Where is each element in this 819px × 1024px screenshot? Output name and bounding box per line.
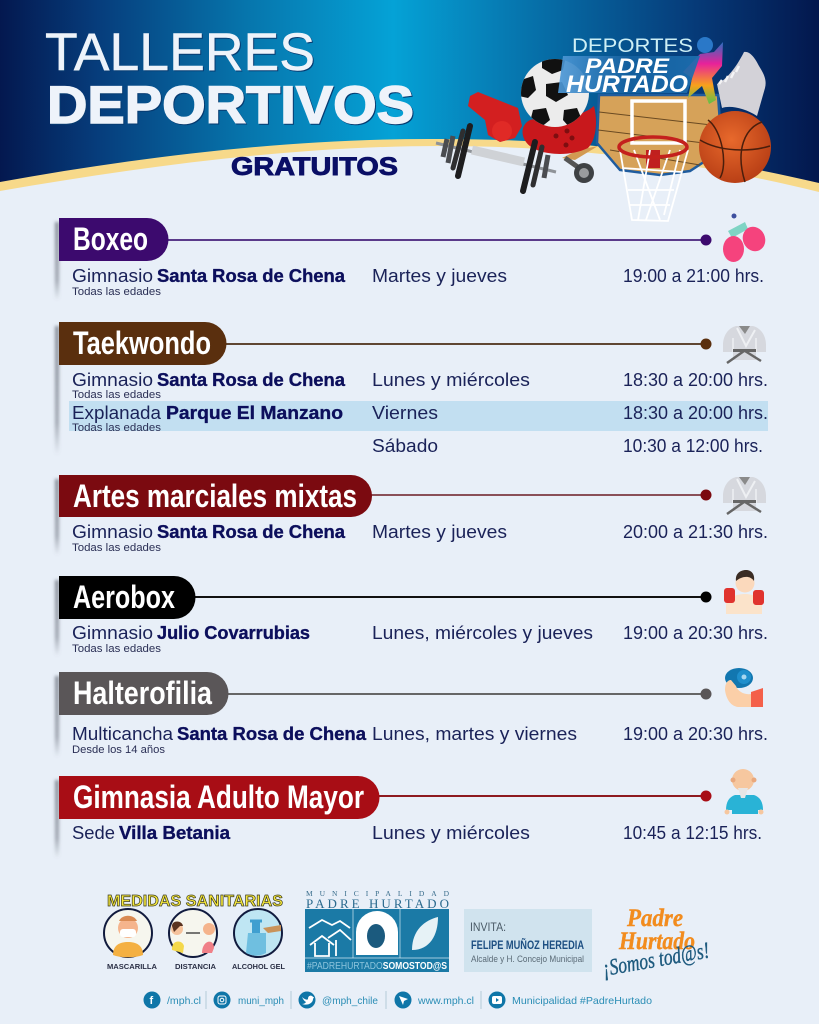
label: distancia: DISTANCIA bbox=[175, 962, 217, 971]
schedule row: Gimnasio bbox=[72, 522, 153, 542]
logo: padre hurtado somos todos: Hurtado bbox=[618, 928, 695, 955]
icon: basketball hoop and net bbox=[619, 137, 688, 221]
schedule row bbox=[72, 623, 768, 655]
logo: deportes padre hurtado: PADRE bbox=[585, 55, 670, 78]
schedule row 1 bbox=[72, 370, 768, 401]
schedule row: 19:00 a 20:30 hrs. bbox=[623, 623, 768, 643]
schedule row: 20:00 a 21:30 hrs. bbox=[623, 522, 768, 542]
icon: martial arts gi bbox=[723, 477, 766, 514]
icon: basketball bbox=[699, 111, 771, 183]
icon: shoe bbox=[717, 52, 766, 116]
title: DEPORTIVOS bbox=[47, 76, 414, 135]
schedule row 1: Santa Rosa de Chena bbox=[157, 370, 346, 390]
icon: boxer bbox=[724, 570, 764, 614]
label: mascarilla: MASCARILLA bbox=[107, 962, 158, 971]
schedule row: Lunes, martes y viernes bbox=[372, 724, 577, 744]
logo: padre hurtado somos todos: ¡Somos tod@s! bbox=[601, 938, 711, 981]
icon: whistle bbox=[468, 92, 522, 142]
icon: arm with weight bbox=[725, 668, 763, 707]
youtube: Municipalidad #PadreHurtado bbox=[512, 995, 652, 1007]
sports illustration bbox=[436, 35, 771, 221]
schedule row 2: 18:30 a 20:00 hrs. bbox=[623, 403, 768, 423]
heading: Gimnasia Adulto Mayor: Gimnasia Adulto Mayor bbox=[73, 779, 364, 815]
icon: soccer ball bbox=[519, 56, 589, 128]
schedule row bbox=[72, 823, 762, 843]
panel: invita: FELIPE MUÑOZ HEREDIA bbox=[471, 939, 584, 952]
panel: Halterofilia bbox=[55, 668, 768, 757]
icon: alcohol gel bbox=[234, 909, 282, 957]
logo: padre hurtado somos todos bbox=[601, 905, 711, 981]
schedule row bbox=[72, 266, 764, 298]
icon: distance bbox=[169, 909, 217, 957]
schedule row: Santa Rosa de Chena bbox=[177, 724, 367, 744]
schedule row: Desde los 14 años bbox=[72, 744, 166, 756]
schedule row: Gimnasio bbox=[72, 623, 153, 643]
subtitle: GRATUITOS bbox=[231, 153, 398, 181]
schedule row 2: Parque El Manzano bbox=[166, 403, 343, 423]
schedule row 1: Todas las edades bbox=[72, 389, 162, 401]
schedule row: Multicancha bbox=[72, 724, 174, 744]
icon: backboard bbox=[597, 95, 722, 175]
schedule row 3: Sábado bbox=[372, 436, 438, 456]
instagram bbox=[214, 992, 284, 1008]
panel: Aerobox bbox=[55, 570, 768, 656]
heading: Taekwondo: Taekwondo bbox=[73, 325, 211, 361]
schedule row 3 bbox=[372, 436, 763, 456]
schedule row: 19:00 a 20:30 hrs. bbox=[623, 724, 768, 744]
schedule row: Lunes, miércoles y jueves bbox=[372, 623, 593, 643]
panel: invita: INVITA: bbox=[470, 922, 506, 934]
schedule row 2: Explanada bbox=[72, 403, 162, 423]
icon: dumbbell bbox=[436, 126, 556, 191]
schedule row 2: Viernes bbox=[372, 403, 438, 423]
schedule row: Villa Betania bbox=[119, 823, 231, 843]
schedule row 3: 10:30 a 12:00 hrs. bbox=[623, 436, 763, 456]
heading: medidas sanitarias: MEDIDAS SANITARIAS bbox=[107, 893, 283, 910]
title: TALLERES bbox=[45, 23, 315, 82]
heading: Artes marciales mixtas: Artes marciales mixtas bbox=[73, 478, 357, 514]
schedule row bbox=[72, 724, 768, 756]
instagram: muni_mph bbox=[238, 995, 284, 1007]
schedule row 1: Gimnasio bbox=[72, 370, 153, 390]
schedule row: Martes y jueves bbox=[372, 522, 507, 542]
schedule row 1: 18:30 a 20:00 hrs. bbox=[623, 370, 768, 390]
logo: deportes padre hurtado bbox=[558, 35, 700, 98]
icon: boxing gloves bbox=[723, 214, 769, 262]
schedule row: Julio Covarrubias bbox=[157, 623, 310, 643]
logo: deportes padre hurtado: HURTADO bbox=[566, 71, 688, 98]
schedule row: Todas las edades bbox=[72, 542, 162, 554]
schedule row: Santa Rosa de Chena bbox=[157, 266, 346, 286]
panel: Taekwondo bbox=[55, 322, 768, 456]
heading: Boxeo: Boxeo bbox=[73, 221, 148, 257]
schedule row: Santa Rosa de Chena bbox=[157, 522, 346, 542]
schedule row: Lunes y miércoles bbox=[372, 823, 530, 843]
panel: Gimnasia Adulto Mayor bbox=[55, 769, 764, 858]
panel: sanitary measures bbox=[104, 893, 285, 971]
twitter bbox=[298, 992, 378, 1008]
panel: invita: Alcalde y H. Concejo Municipal bbox=[471, 954, 584, 965]
label: alcohol gel: ALCOHOL GEL bbox=[232, 962, 285, 971]
schedule row: Martes y jueves bbox=[372, 266, 507, 286]
heading: Halterofilia: Halterofilia bbox=[73, 675, 212, 711]
logo: municipalidad padre hurtado bbox=[305, 889, 450, 972]
icon: skateboard bbox=[523, 106, 598, 183]
website: www.mph.cl bbox=[417, 995, 474, 1007]
website bbox=[394, 992, 474, 1008]
panel: Artes marciales mixtas bbox=[55, 475, 768, 555]
schedule row: Sede bbox=[72, 823, 115, 843]
heading: Taekwondo bbox=[59, 322, 226, 365]
schedule row: Gimnasio bbox=[72, 266, 153, 286]
icon: martial arts gi bbox=[723, 326, 766, 363]
schedule row: 19:00 a 21:00 hrs. bbox=[623, 266, 764, 286]
logo: municipalidad padre hurtado: MUNICIPALIDAD bbox=[306, 889, 450, 898]
panel: Boxeo bbox=[55, 214, 769, 300]
twitter: @mph_chile bbox=[322, 995, 378, 1007]
schedule row bbox=[72, 522, 768, 554]
schedule row 2 bbox=[72, 403, 768, 434]
schedule row: Todas las edades bbox=[72, 286, 162, 298]
facebook bbox=[144, 992, 201, 1008]
logo: municipalidad padre hurtado: #PADREHURTADOSOMOSTOD@S bbox=[307, 961, 447, 972]
schedule row: Todas las edades bbox=[72, 643, 162, 655]
icon: runner bbox=[683, 37, 723, 104]
schedule row 2: Todas las edades bbox=[72, 422, 162, 434]
icon: elderly man bbox=[724, 769, 764, 814]
logo: padre hurtado somos todos: Padre bbox=[626, 905, 683, 932]
social media bar bbox=[144, 991, 652, 1009]
highlight row bbox=[69, 401, 768, 431]
logo: municipalidad padre hurtado: PADRE HURTADO bbox=[306, 896, 449, 911]
title bbox=[45, 23, 414, 135]
header band bbox=[0, 0, 819, 192]
heading: Aerobox: Aerobox bbox=[73, 579, 175, 615]
icon: mask bbox=[104, 909, 152, 957]
youtube bbox=[488, 992, 652, 1008]
schedule row 1: Lunes y miércoles bbox=[372, 370, 530, 390]
facebook: /mph.cl bbox=[167, 995, 201, 1007]
facebook: f bbox=[150, 995, 154, 1007]
logo: deportes padre hurtado: DEPORTES bbox=[572, 35, 693, 57]
schedule row: 10:45 a 12:15 hrs. bbox=[623, 823, 762, 843]
panel: invita bbox=[464, 909, 592, 972]
